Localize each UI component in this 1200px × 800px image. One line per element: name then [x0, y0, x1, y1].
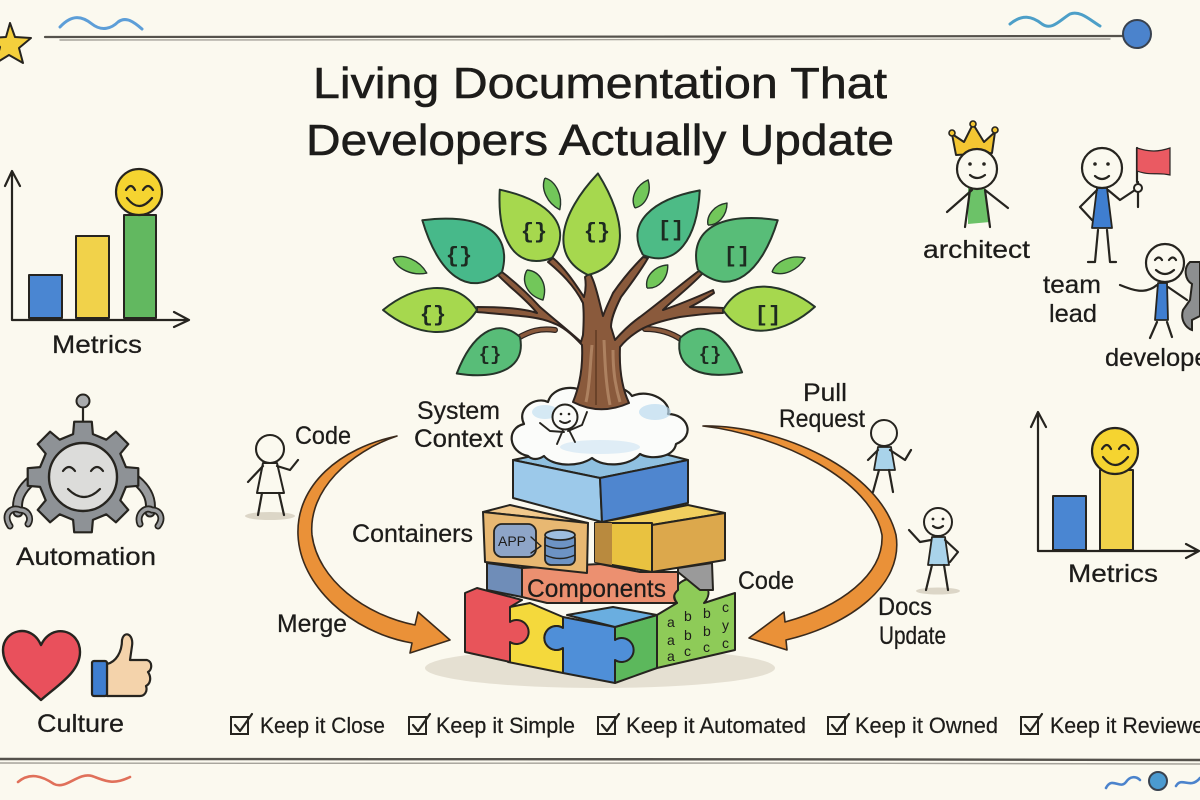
leaf: upper left: {}: [521, 220, 547, 245]
title: [306, 59, 894, 165]
icon: arrow to database: [531, 537, 541, 553]
stack: containers layer: [483, 505, 725, 573]
icon: bottom right circle: [1149, 772, 1167, 790]
squiggle: bottom far right: [1176, 778, 1200, 786]
title: Living Documentation That: [313, 59, 887, 108]
puzzle: lime piece with letters: a: [667, 632, 675, 648]
icon: smiley: [116, 169, 162, 215]
label: system context: Context: [414, 425, 503, 453]
figure: person in cloud: [540, 404, 587, 444]
check item: close: Keep it Close: [260, 713, 385, 738]
icon: heart: [3, 631, 80, 700]
leaf: left: {}: [420, 303, 446, 328]
top border line: [45, 36, 1122, 40]
leaf: right: []: [755, 303, 781, 328]
leaf: bottom right: {}: [699, 344, 721, 366]
tree trunk and branches: [477, 257, 723, 409]
small leaves: [390, 175, 808, 304]
checklist: [231, 713, 1200, 738]
label: merge: Merge: [277, 610, 347, 638]
figure: doc updater: [909, 508, 960, 594]
leaf: center: {}: [584, 220, 610, 245]
puzzle: lime piece with letters: a: [667, 648, 675, 664]
puzzle: lime piece with letters: c: [703, 639, 710, 655]
figure: coder: [245, 435, 298, 520]
squiggle: top left: [60, 18, 142, 29]
icon: app window: APP: [498, 533, 526, 549]
check item: owned: Keep it Owned: [855, 713, 998, 738]
puzzle: lime piece with letters: b: [703, 605, 711, 621]
figure: team lead: lead: [1049, 300, 1097, 328]
stack: puzzle layer: [465, 579, 735, 683]
icon: app window: [494, 524, 536, 557]
label: docs update: Docs: [878, 593, 932, 621]
leaf: center: [560, 171, 626, 278]
figure: team lead: [1043, 148, 1170, 328]
puzzle: blue piece: [544, 617, 634, 683]
squiggle: bottom right: [1106, 777, 1140, 788]
figure: architect: [923, 121, 1030, 264]
puzzle: yellow piece: [508, 603, 563, 673]
title: Developers Actually Update: [306, 116, 894, 165]
puzzle: lime piece with letters: a: [667, 614, 675, 630]
check item: simple: Keep it Simple: [436, 713, 575, 738]
leaf: upper left: [479, 174, 573, 274]
panel: culture: [3, 631, 151, 738]
bottom border line: [0, 759, 1200, 764]
label: pull request: Pull: [803, 379, 847, 407]
label: system context: [414, 397, 503, 453]
leaf: bottom left: [446, 319, 531, 392]
label: docs update: [878, 593, 946, 650]
panel: metrics chart right: [1031, 412, 1199, 588]
puzzle: lime piece with letters: [657, 579, 735, 668]
puzzle: blue top: [567, 607, 657, 627]
icon: smiley: [1092, 428, 1138, 474]
label: pull request: Request: [779, 405, 865, 433]
icon: gear face: [28, 422, 138, 532]
puzzle: lime piece with letters: c: [722, 599, 729, 615]
squiggle: bottom left: [18, 775, 130, 785]
leaf: left: [383, 288, 477, 332]
puzzle: lime piece with letters: b: [703, 623, 711, 639]
label: code left: Code: [295, 422, 351, 450]
label: containers: Containers: [352, 520, 473, 548]
figure: team lead: team: [1043, 271, 1101, 299]
panel: metrics chart right: Metrics: [1068, 560, 1158, 588]
arrow: right loop: [703, 426, 897, 650]
icon: database: [545, 530, 575, 565]
panel: culture: Culture: [37, 710, 124, 738]
leaf: top right: [683, 195, 793, 295]
tree twigs: [518, 329, 682, 340]
icon: gear robot arms: [7, 480, 161, 526]
puzzle: lime piece with letters: b: [684, 627, 692, 643]
leaf: upper right: []: [658, 218, 684, 243]
leaf: right: [722, 285, 816, 332]
puzzle: red piece: [465, 588, 529, 662]
label: docs update: Update: [879, 622, 946, 650]
leaf: bottom left: {}: [479, 344, 501, 366]
stack: components layer: Components: [527, 575, 666, 603]
leaf: top left: [406, 196, 518, 296]
leaf: top right: []: [724, 244, 750, 269]
puzzle: lime piece with letters: b: [684, 608, 692, 624]
check item: automated: Keep it Automated: [626, 713, 806, 738]
panel: automation: Automation: [16, 543, 156, 571]
puzzle: lime piece with letters: c: [722, 635, 729, 651]
icon: thumbs up: [92, 634, 151, 696]
ground shadow: [425, 648, 775, 688]
puzzle: lime piece with letters: y: [722, 617, 729, 633]
label: pull request: [779, 379, 865, 433]
icon: top right circle: [1123, 20, 1151, 48]
label: code right: Code: [738, 567, 794, 595]
stack: system context layer: [513, 440, 688, 522]
label: system context: System: [417, 397, 500, 425]
icon: star: [0, 23, 31, 63]
squiggle: top right: [1010, 13, 1100, 26]
leaf: bottom right: [670, 320, 752, 391]
leaf: upper right: [625, 174, 718, 271]
leaf: top left: {}: [446, 244, 472, 269]
figure: reviewer: [868, 420, 911, 492]
figure: architect: architect: [923, 236, 1030, 264]
panel: metrics chart left: [5, 169, 189, 359]
tree: [383, 171, 816, 409]
cloud: [512, 387, 688, 465]
panel: metrics chart left: Metrics: [52, 331, 142, 359]
arrow: left loop: [298, 436, 450, 653]
panel: roles: [923, 121, 1200, 372]
stack: components layer: [487, 563, 713, 603]
panel: automation: [7, 394, 161, 571]
puzzle: lime piece with letters: c: [684, 643, 691, 659]
puzzle: green piece: [615, 615, 657, 683]
icon: gear antenna: [76, 394, 90, 425]
figure: developer: [1105, 244, 1200, 372]
